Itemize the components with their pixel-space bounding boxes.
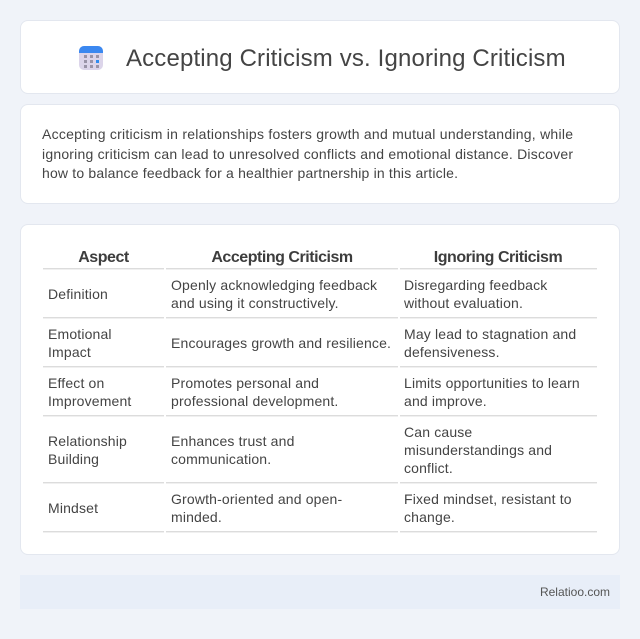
- row: Effect on Improvement: Promotes personal and: [171, 375, 319, 391]
- row: Relationship Building: Enhances trust and: [171, 433, 295, 449]
- row: Definition: [48, 277, 548, 311]
- row: Relationship Building: communication.: [171, 451, 271, 467]
- row: Relationship Building: Can cause: [404, 424, 472, 440]
- row: Emotional Impact: [48, 326, 576, 360]
- row: Mindset: Fixed mindset, resistant to: [404, 491, 572, 507]
- intro text: ignoring criticism can lead to unresolved conflicts and emotional distance. Discover: [42, 146, 573, 162]
- row: Effect on Improvement: [48, 375, 580, 409]
- row: Effect on Improvement: Effect on: [48, 375, 104, 391]
- row: Effect on Improvement: Limits opportunities to learn: [404, 375, 580, 391]
- row: Definition: without evaluation.: [404, 295, 523, 311]
- footer source: Relatioo.com: [540, 585, 610, 599]
- panel: introduction: [20, 104, 620, 204]
- row: Relationship Building: Relationship: [48, 433, 127, 449]
- row: Definition: Definition: [48, 286, 108, 302]
- row: Emotional Impact: Encourages growth and resilience.: [171, 335, 391, 351]
- row: Emotional Impact: defensiveness.: [404, 344, 500, 360]
- table header: Aspect: Aspect: [78, 249, 129, 266]
- intro text: Accepting criticism in relationships fosters growth and mutual understanding, while: [42, 126, 573, 142]
- row: Mindset: change.: [404, 509, 455, 525]
- row: Definition: Openly acknowledging feedback: [171, 277, 377, 293]
- row: Definition: and using it constructively.: [171, 295, 339, 311]
- panel: title header: [20, 20, 620, 94]
- intro text: [42, 126, 573, 181]
- panel: comparison table: [20, 224, 620, 555]
- row: Effect on Improvement: and improve.: [404, 393, 487, 409]
- intro text: how to balance feedback for a healthier partnership in this article.: [42, 165, 458, 181]
- footer bar: [20, 575, 620, 609]
- title: Accepting Criticism vs. Ignoring Criticism: [126, 45, 566, 72]
- icon: calendar: [79, 46, 103, 70]
- row: Relationship Building: Building: [48, 451, 99, 467]
- row: Relationship Building: conflict.: [404, 460, 453, 476]
- row: Effect on Improvement: Improvement: [48, 393, 131, 409]
- row: Mindset: [48, 491, 572, 525]
- table header: Accepting Criticism: Accepting Criticism: [211, 249, 353, 266]
- row: Emotional Impact: May lead to stagnation and: [404, 326, 576, 342]
- row: Mindset: Growth-oriented and open-: [171, 491, 342, 507]
- row: Definition: Disregarding feedback: [404, 277, 547, 293]
- table header: Ignoring Criticism: Ignoring Criticism: [434, 249, 562, 266]
- row: Effect on Improvement: professional development.: [171, 393, 338, 409]
- row: Mindset: minded.: [171, 509, 222, 525]
- row: Emotional Impact: Impact: [48, 344, 91, 360]
- row: Mindset: Mindset: [48, 500, 98, 516]
- row: Relationship Building: [48, 424, 552, 476]
- row: Emotional Impact: Emotional: [48, 326, 112, 342]
- row: Relationship Building: misunderstandings and: [404, 442, 552, 458]
